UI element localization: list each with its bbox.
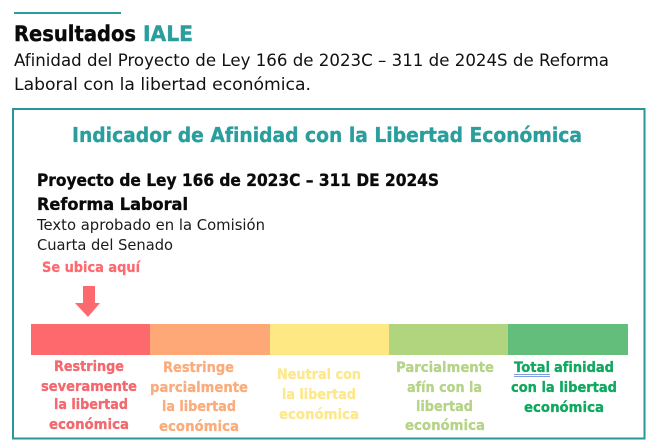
label: severely restricts: económica xyxy=(49,417,129,433)
panel: indicator xyxy=(13,109,644,438)
label: partially aligned: libertad xyxy=(416,399,473,415)
label: partially restricts: la libertad xyxy=(162,399,236,415)
bill title xyxy=(37,171,439,215)
label: severely restricts: severamente xyxy=(41,379,137,395)
label: total affinity: con la libertad xyxy=(511,380,617,396)
label: partially aligned xyxy=(396,360,494,434)
label: total affinity xyxy=(511,360,617,416)
subtitle: Afinidad del Proyecto de Ley 166 de 2023C – 311 de 2024S de Reforma xyxy=(14,51,609,71)
label: partially aligned: económica xyxy=(405,418,485,434)
bill title: Reforma Laboral xyxy=(37,195,188,215)
label: severely restricts xyxy=(41,359,137,433)
icon: arrow down xyxy=(75,286,100,317)
label: partially restricts: económica xyxy=(159,419,239,435)
label: partially aligned: Parcialmente xyxy=(396,360,494,376)
label: neutral xyxy=(277,367,361,423)
label: neutral: la libertad xyxy=(282,387,356,403)
title: Resultados xyxy=(14,22,136,46)
label: partially restricts xyxy=(150,360,248,435)
panel heading: Indicador de Afinidad con la Libertad Económica xyxy=(72,123,582,147)
label: neutral: económica xyxy=(279,407,359,423)
bill title: Proyecto de Ley 166 de 2023C – 311 DE 2024S xyxy=(37,171,439,191)
label: severely restricts: la libertad xyxy=(54,397,128,413)
label: total affinity: afinidad xyxy=(554,360,614,376)
label: partially restricts: Restringe xyxy=(163,360,234,376)
subtitle xyxy=(14,51,609,95)
bill description xyxy=(36,216,265,254)
label: total affinity: económica xyxy=(524,400,604,416)
scale bar xyxy=(31,324,628,355)
label: partially aligned: afín con la xyxy=(407,380,482,396)
title accent: IALE: IALE xyxy=(143,22,193,46)
label: neutral: Neutral con xyxy=(277,367,361,383)
label: total affinity: Total xyxy=(514,360,550,376)
bill description: Texto aprobado en la Comisión xyxy=(36,216,265,234)
label: partially restricts: parcialmente xyxy=(150,380,248,396)
subtitle: Laboral con la libertad económica. xyxy=(14,75,311,95)
label: severely restricts: Restringe xyxy=(54,359,124,375)
marker label: Se ubica aquí xyxy=(42,260,141,276)
bill description: Cuarta del Senado xyxy=(37,236,173,254)
